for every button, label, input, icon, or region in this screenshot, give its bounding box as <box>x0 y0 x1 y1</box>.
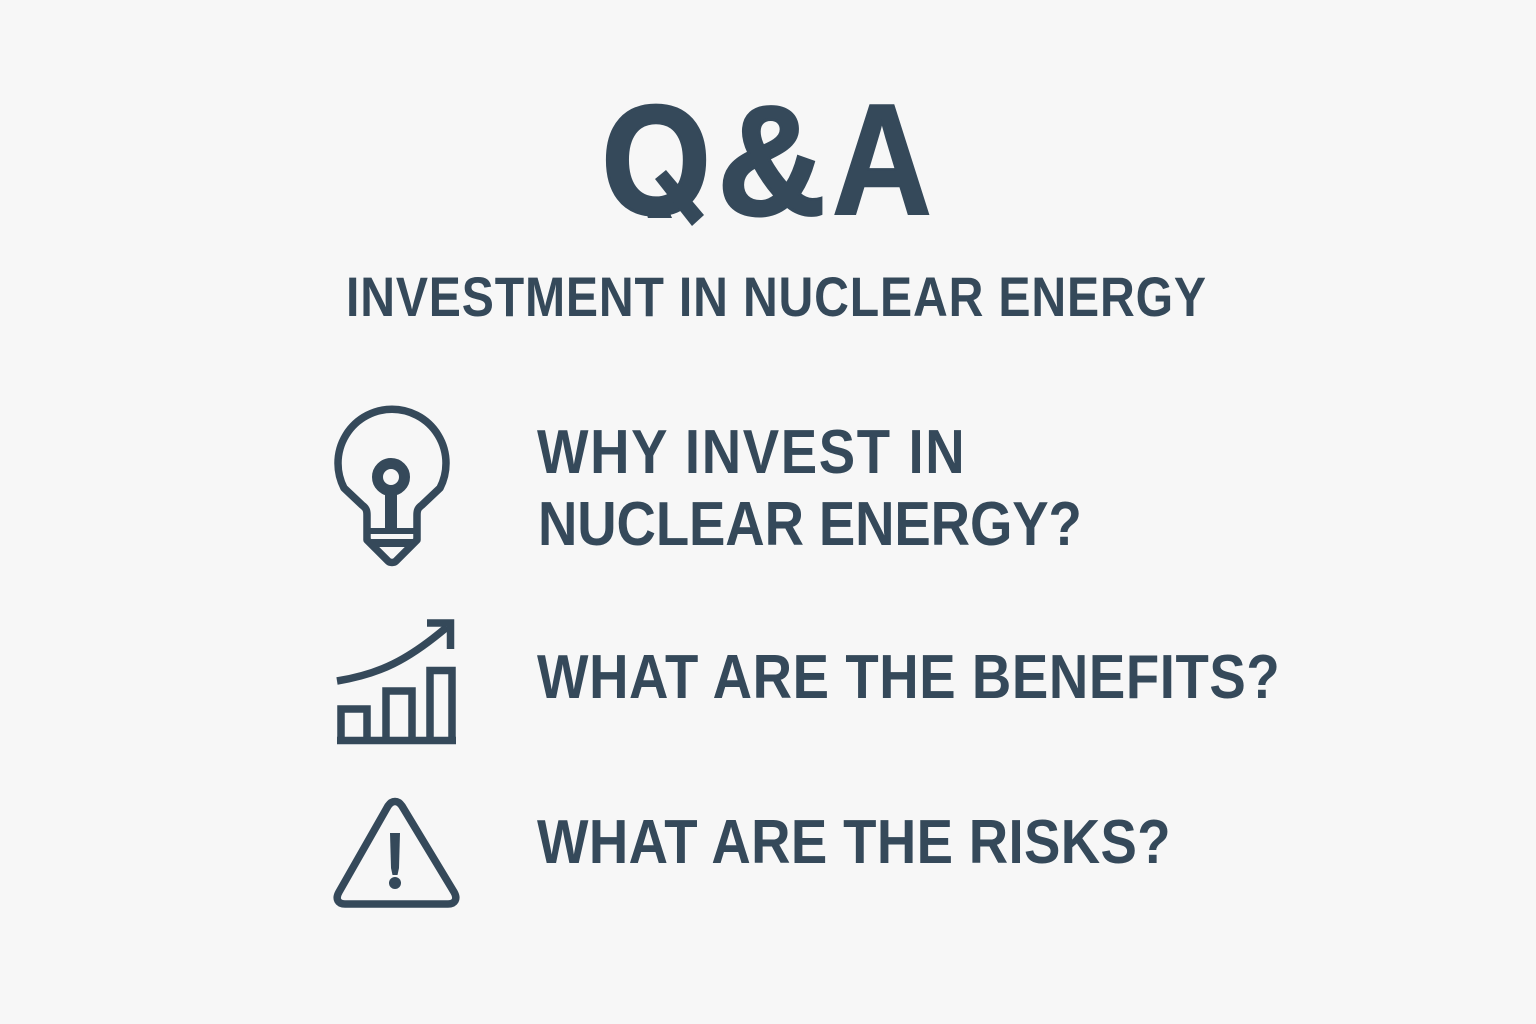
title <box>606 104 930 226</box>
title: Q <box>602 74 711 248</box>
title: A <box>832 72 932 248</box>
icon: light bulb <box>338 409 446 562</box>
subtitle: INVESTMENT IN NUCLEAR ENERGY <box>346 267 1206 329</box>
question 1: NUCLEAR ENERGY? <box>538 490 1082 559</box>
question 1: WHY INVEST IN <box>537 418 965 487</box>
question 2: WHAT ARE THE BENEFITS? <box>537 643 1280 712</box>
question 3: WHAT ARE THE RISKS? <box>537 808 1171 877</box>
question 1 <box>537 418 1082 559</box>
icon: rising bar chart <box>337 623 456 741</box>
icon: warning triangle <box>337 802 456 904</box>
title: & <box>718 75 826 248</box>
